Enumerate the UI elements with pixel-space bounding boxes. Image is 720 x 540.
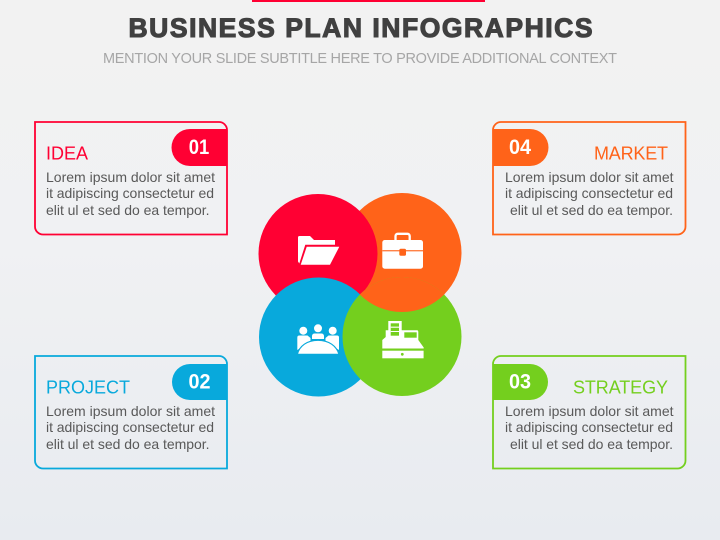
heading: PROJECT <box>46 378 130 398</box>
panel border <box>493 356 686 468</box>
body text: Lorem ipsum dolor sit amet <box>46 403 215 419</box>
panel: strategy <box>493 356 686 468</box>
body text <box>505 169 674 218</box>
body text: elit ul et sed do ea tempor. <box>46 436 210 452</box>
title: BUSINESS PLAN INFOGRAPHICS <box>128 13 592 43</box>
icon: folder <box>298 236 339 265</box>
icon: briefcase <box>382 234 423 269</box>
body text: Lorem ipsum dolor sit amet <box>505 169 674 185</box>
body text: it adipiscing consectetur ed <box>505 185 673 201</box>
number badge 03: 03 <box>509 370 531 394</box>
number badge 02 <box>172 364 227 400</box>
panel border <box>35 356 227 468</box>
icon: cash register <box>382 321 424 358</box>
heading: STRATEGY <box>573 378 668 398</box>
body text: it adipiscing consectetur ed <box>46 419 214 435</box>
body text: Lorem ipsum dolor sit amet <box>505 403 674 419</box>
number badge 03 <box>493 364 548 400</box>
subtitle: MENTION YOUR SLIDE SUBTITLE HERE TO PROVIDE ADDITIONAL CONTEXT <box>103 51 617 67</box>
top accent bar <box>252 0 485 2</box>
number badge 04 <box>493 129 548 166</box>
body text: it adipiscing consectetur ed <box>505 419 673 435</box>
panel border <box>493 122 686 234</box>
body text <box>46 403 215 452</box>
heading: IDEA <box>46 144 88 164</box>
number badge 01: 01 <box>189 136 209 159</box>
body text <box>505 403 674 452</box>
body text: Lorem ipsum dolor sit amet <box>46 169 215 185</box>
body text: elit ul et sed do ea tempor. <box>510 202 673 218</box>
overlapping circles <box>258 193 462 396</box>
panel: idea <box>35 122 227 234</box>
panel border <box>35 122 227 234</box>
icon: team at table <box>297 324 340 356</box>
body text: it adipiscing consectetur ed <box>46 185 214 201</box>
panel: market <box>493 122 686 234</box>
body text: elit ul et sed do ea tempor. <box>510 436 673 452</box>
heading: MARKET <box>594 144 668 164</box>
number badge 02: 02 <box>188 370 210 394</box>
body text <box>46 169 215 218</box>
body text: elit ul et sed do ea tempor. <box>46 202 210 218</box>
number badge 01 <box>172 129 227 166</box>
number badge 04: 04 <box>509 136 531 159</box>
panel: project <box>35 356 227 468</box>
